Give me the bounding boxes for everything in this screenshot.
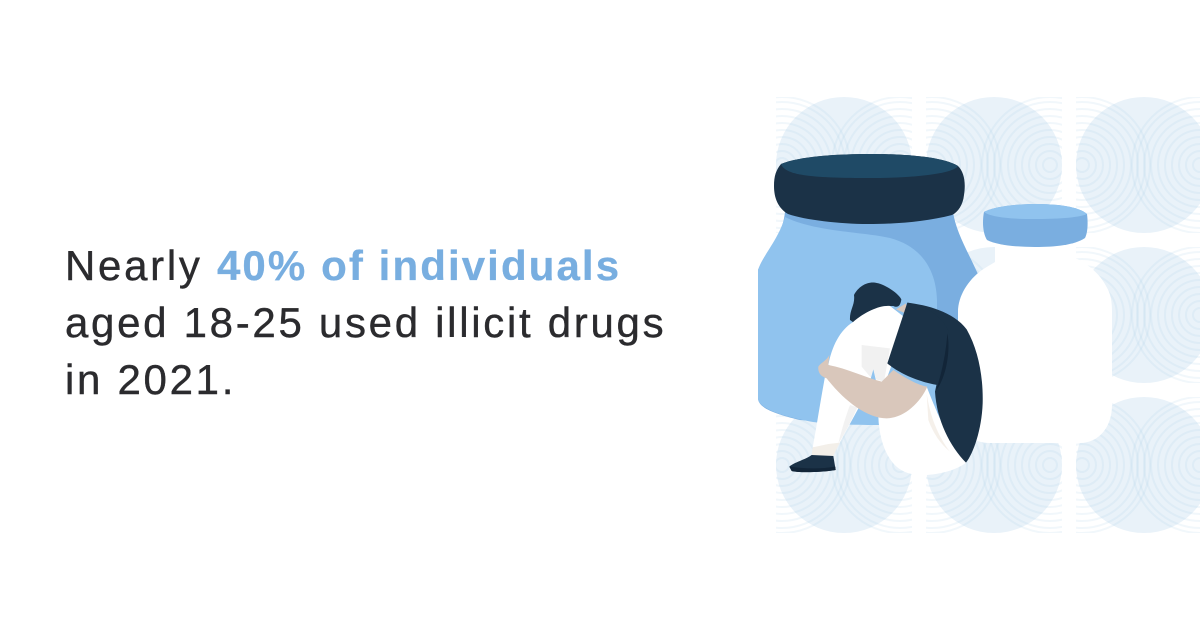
jar lid top <box>781 154 958 178</box>
dark top <box>887 303 950 385</box>
shoe sole <box>789 467 836 472</box>
bottle body <box>958 240 1112 443</box>
gap between limbs <box>871 369 876 381</box>
hair strand <box>936 333 948 391</box>
white bottle <box>958 204 1112 443</box>
trouser shadow <box>927 393 950 452</box>
illustration <box>758 97 1200 533</box>
background pattern of ringed circles <box>714 97 1200 533</box>
headline text <box>65 242 666 403</box>
shoe <box>789 455 836 472</box>
ankle cuff <box>812 443 840 456</box>
shin <box>813 377 859 447</box>
knee and shirt <box>828 306 908 383</box>
bottle lid <box>983 204 1088 247</box>
headline text: in 2021. <box>65 356 236 403</box>
inner shin shadow <box>838 405 857 443</box>
long hair <box>907 303 983 463</box>
headline text: Nearly 40% of individuals <box>65 242 621 289</box>
large pill jar <box>758 154 990 425</box>
jar body <box>758 212 990 425</box>
jar body highlight <box>758 217 937 425</box>
crouching person <box>789 283 983 475</box>
neck <box>896 303 907 314</box>
headline text: aged 18-25 used illicit drugs <box>65 299 666 346</box>
jar lid <box>774 154 965 224</box>
arm <box>818 355 927 418</box>
lower body <box>878 387 966 475</box>
hair bun <box>850 283 901 322</box>
shirt shadow <box>862 345 890 382</box>
bottle lid top <box>984 204 1087 219</box>
